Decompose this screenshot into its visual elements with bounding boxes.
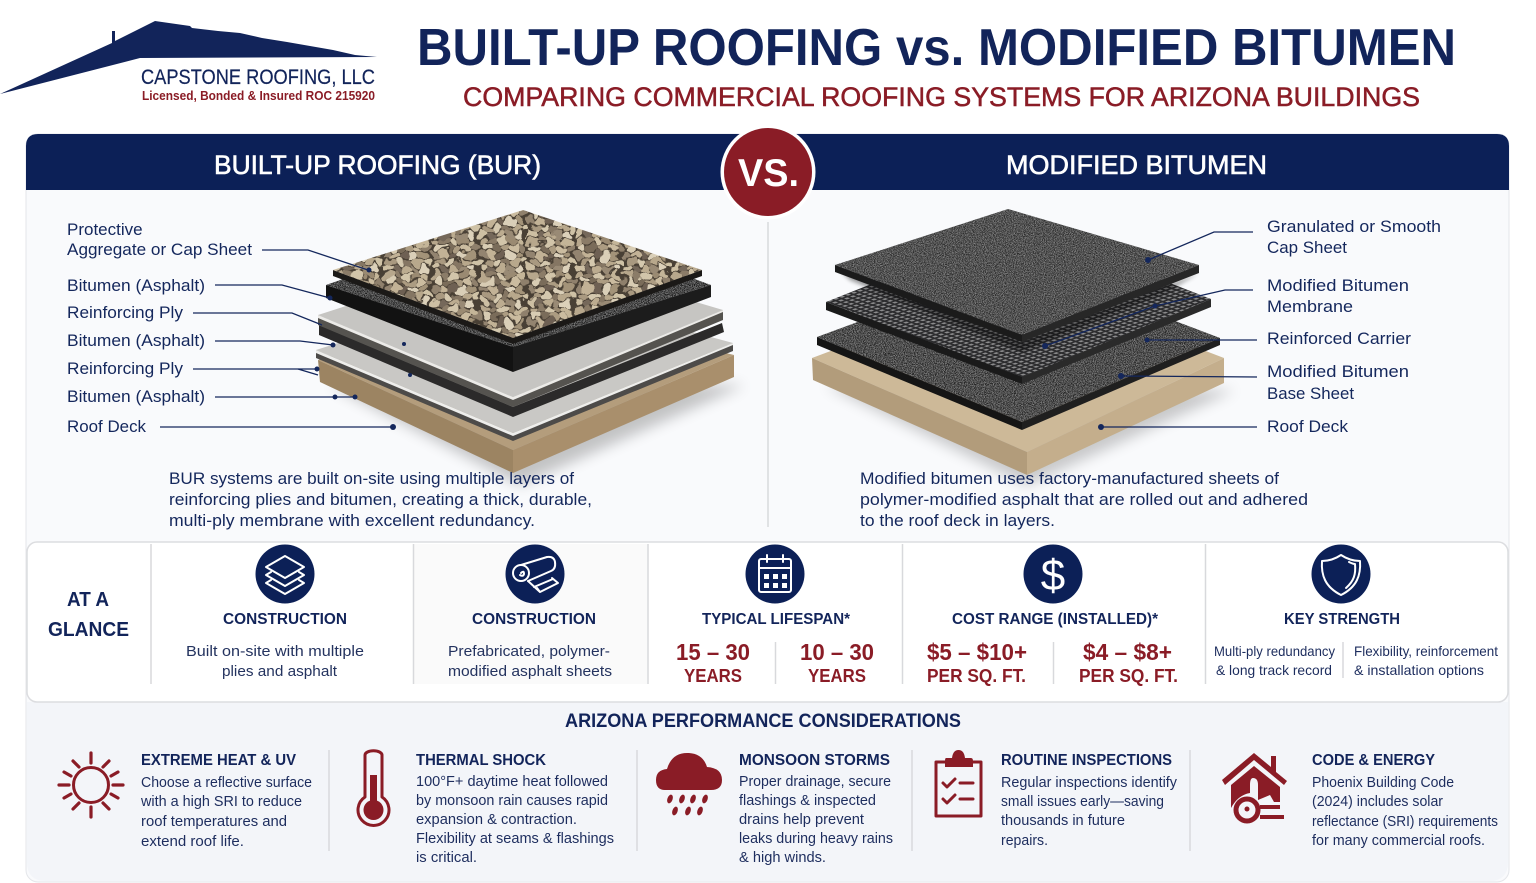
heading: at a glance: AT A [67, 588, 109, 611]
heading: Arizona performance: ARIZONA PERFORMANCE CONSIDERATIONS [565, 711, 961, 732]
block: monsoon storms: Proper drainage, secure [739, 774, 891, 790]
BUR description: BUR systems are built on-site using multiple layers of [169, 469, 574, 488]
icon: rain cloud [656, 753, 722, 816]
label: base sheet: Modified Bitumen [1267, 362, 1409, 381]
modified bitumen description: polymer-modified asphalt that are rolled out and adhered [860, 490, 1308, 509]
column: key strength: Multi-ply redundancy [1214, 643, 1335, 659]
icon: roof silhouette [0, 21, 377, 94]
block: monsoon storms [739, 752, 893, 866]
label: bitumen 1: Bitumen (Asphalt) [67, 276, 205, 295]
column: BUR construction: Built on-site with multiple [186, 644, 364, 660]
column: mod bit construction: modified asphalt sheets [448, 664, 612, 680]
column: mod bit construction [448, 611, 612, 680]
layer: roof deck [812, 280, 1224, 475]
column: cost [927, 611, 1178, 686]
label: bitumen 2: Bitumen (Asphalt) [67, 331, 205, 350]
label: cap sheet: Granulated or Smooth [1267, 217, 1441, 236]
block: extreme heat: with a high SRI to reduce [140, 794, 302, 810]
block: code and energy: Phoenix Building Code [1312, 775, 1454, 791]
block: monsoon storms: leaks during heavy rains [739, 831, 893, 847]
layer: reinforcing ply lower [316, 285, 733, 441]
label: aggregate: Protective [67, 220, 143, 239]
layer: reinforcing ply upper [318, 250, 723, 407]
layer: base sheet [817, 262, 1220, 430]
icon: membrane roll [506, 544, 564, 604]
logo [0, 21, 377, 103]
block: code and energy [1312, 752, 1498, 849]
block: extreme heat: Choose a reflective surface [141, 775, 312, 791]
block: routine inspections: small issues early—saving [1001, 794, 1164, 810]
label: cap sheet: Cap Sheet [1267, 238, 1347, 257]
column: key strength: & long track record [1216, 662, 1332, 678]
label: base sheet: Base Sheet [1267, 384, 1354, 403]
label: carrier: Reinforced Carrier [1267, 329, 1411, 348]
block: thermal shock: Flexibility at seams & flashings [416, 831, 614, 847]
column: lifespan: YEARS [808, 666, 866, 686]
block: code and energy: reflectance (SRI) requirements [1312, 814, 1498, 830]
divider between systems [767, 222, 769, 527]
block: routine inspections: Regular inspections identify [1001, 775, 1178, 791]
label: reinforcing 1: Reinforcing Ply [67, 303, 184, 322]
label: reinforcing 2: Reinforcing Ply [67, 359, 184, 378]
column: BUR construction: CONSTRUCTION [223, 611, 347, 628]
layer: roof deck [318, 300, 734, 473]
icon: thermometer [358, 751, 389, 825]
block: extreme heat [140, 752, 312, 850]
column: cost: COST RANGE (INSTALLED)* [952, 611, 1159, 628]
column: mod bit construction: CONSTRUCTION [472, 611, 596, 628]
column: lifespan: YEARS [684, 666, 742, 686]
column: cost: PER SQ. FT. [927, 666, 1026, 686]
modified bitumen leader lines [1042, 232, 1257, 430]
column: mod bit construction: Prefabricated, polymer- [448, 644, 610, 660]
block: extreme heat: roof temperatures and [141, 814, 287, 830]
icon: layers [256, 544, 314, 604]
license line: Licensed, Bonded & Insured ROC 215920 [142, 89, 375, 103]
VS badge [720, 124, 816, 220]
block: monsoon storms: flashings & inspected [739, 793, 876, 809]
diagram: modified bitumen stack [812, 209, 1235, 485]
label: membrane: Modified Bitumen [1267, 276, 1409, 295]
label: aggregate: Aggregate or Cap Sheet [67, 240, 252, 259]
block: routine inspections [1001, 752, 1178, 849]
column: lifespan [676, 611, 874, 686]
modified bitumen description: to the roof deck in layers. [860, 511, 1055, 530]
block: thermal shock: expansion & contraction. [416, 812, 577, 828]
icon: checklist [936, 750, 981, 816]
panel: at a glance [27, 542, 1508, 702]
column: key strength: & installation options [1354, 662, 1484, 678]
block: code and energy: (2024) includes solar [1312, 794, 1443, 810]
column: cost: $5 – $10+ [927, 639, 1027, 665]
Arizona dividers [329, 750, 1190, 851]
column: BUR construction [186, 611, 364, 680]
VS badge: VS. [738, 152, 799, 195]
block: extreme heat: EXTREME HEAT & UV [141, 752, 296, 769]
block: code and energy: for many commercial roofs. [1312, 833, 1485, 849]
block: monsoon storms: MONSOON STORMS [739, 752, 890, 769]
layer: aggregate [333, 210, 702, 344]
modified bitumen description: Modified bitumen uses factory-manufactured sheets of [860, 469, 1279, 488]
column: BUR construction: plies and asphalt [222, 664, 337, 680]
column: lifespan: 10 – 30 [800, 639, 874, 665]
icon: house with equipment [1222, 753, 1287, 821]
column: lifespan: 15 – 30 [676, 639, 750, 665]
icon: dollar: $ [1041, 551, 1065, 600]
label: roof deck: Roof Deck [67, 417, 146, 436]
layer: reinforced carrier [826, 225, 1211, 384]
block: thermal shock: THERMAL SHOCK [416, 752, 546, 769]
label: bitumen 3: Bitumen (Asphalt) [67, 387, 205, 406]
company name: CAPSTONE ROOFING, LLC [141, 66, 375, 89]
layer: bitumen lower [319, 323, 724, 417]
column: cost: PER SQ. FT. [1079, 666, 1178, 686]
BUR labels [67, 220, 252, 436]
layer: bitumen upper [326, 216, 711, 372]
label: membrane: Membrane [1267, 297, 1353, 316]
block: thermal shock: by monsoon rain causes rapid [416, 793, 608, 809]
block: routine inspections: ROUTINE INSPECTIONS [1001, 752, 1172, 769]
block: thermal shock: 100°F+ daytime heat followed [416, 774, 608, 790]
block: routine inspections: thousands in future [1001, 813, 1125, 829]
heading: at a glance: GLANCE [48, 618, 129, 641]
subtitle: COMPARING COMMERCIAL ROOFING SYSTEMS FOR ARIZONA BUILDINGS [463, 82, 1420, 112]
column: cost: $4 – $8+ [1083, 639, 1172, 665]
block: monsoon storms: & high winds. [739, 850, 826, 866]
icon: shield [1312, 544, 1370, 604]
column: key strength [1214, 611, 1498, 678]
modified bitumen labels [1267, 217, 1441, 436]
icon: calendar [746, 544, 804, 604]
heading: modified bitumen: MODIFIED BITUMEN [1006, 150, 1267, 180]
panel: Arizona background [27, 702, 1508, 881]
column: key strength: KEY STRENGTH [1284, 611, 1400, 628]
block: thermal shock [416, 752, 614, 866]
column: lifespan: TYPICAL LIFESPAN* [702, 611, 851, 628]
label: roof deck: Roof Deck [1267, 417, 1348, 436]
diagram: BUR layer stack [316, 200, 745, 485]
BUR leader lines [160, 250, 412, 430]
BUR description: reinforcing plies and bitumen, creating a thick, durable, [169, 490, 592, 509]
title: BUILT-UP ROOFING vs. MODIFIED BITUMEN [417, 19, 1456, 77]
block: thermal shock: is critical. [416, 850, 477, 866]
icon: dollar [1024, 544, 1082, 604]
block: code and energy: CODE & ENERGY [1312, 752, 1435, 769]
icon: sun [59, 753, 123, 817]
BUR description: multi-ply membrane with excellent redundancy. [169, 511, 535, 530]
block: monsoon storms: drains help prevent [739, 812, 864, 828]
header band [26, 134, 1509, 190]
layer: cap sheet [835, 209, 1199, 352]
block: extreme heat: extend roof life. [141, 834, 244, 850]
heading: BUR: BUILT-UP ROOFING (BUR) [214, 150, 541, 180]
block: routine inspections: repairs. [1001, 833, 1048, 849]
column: key strength: Flexibility, reinforcement [1354, 643, 1498, 659]
